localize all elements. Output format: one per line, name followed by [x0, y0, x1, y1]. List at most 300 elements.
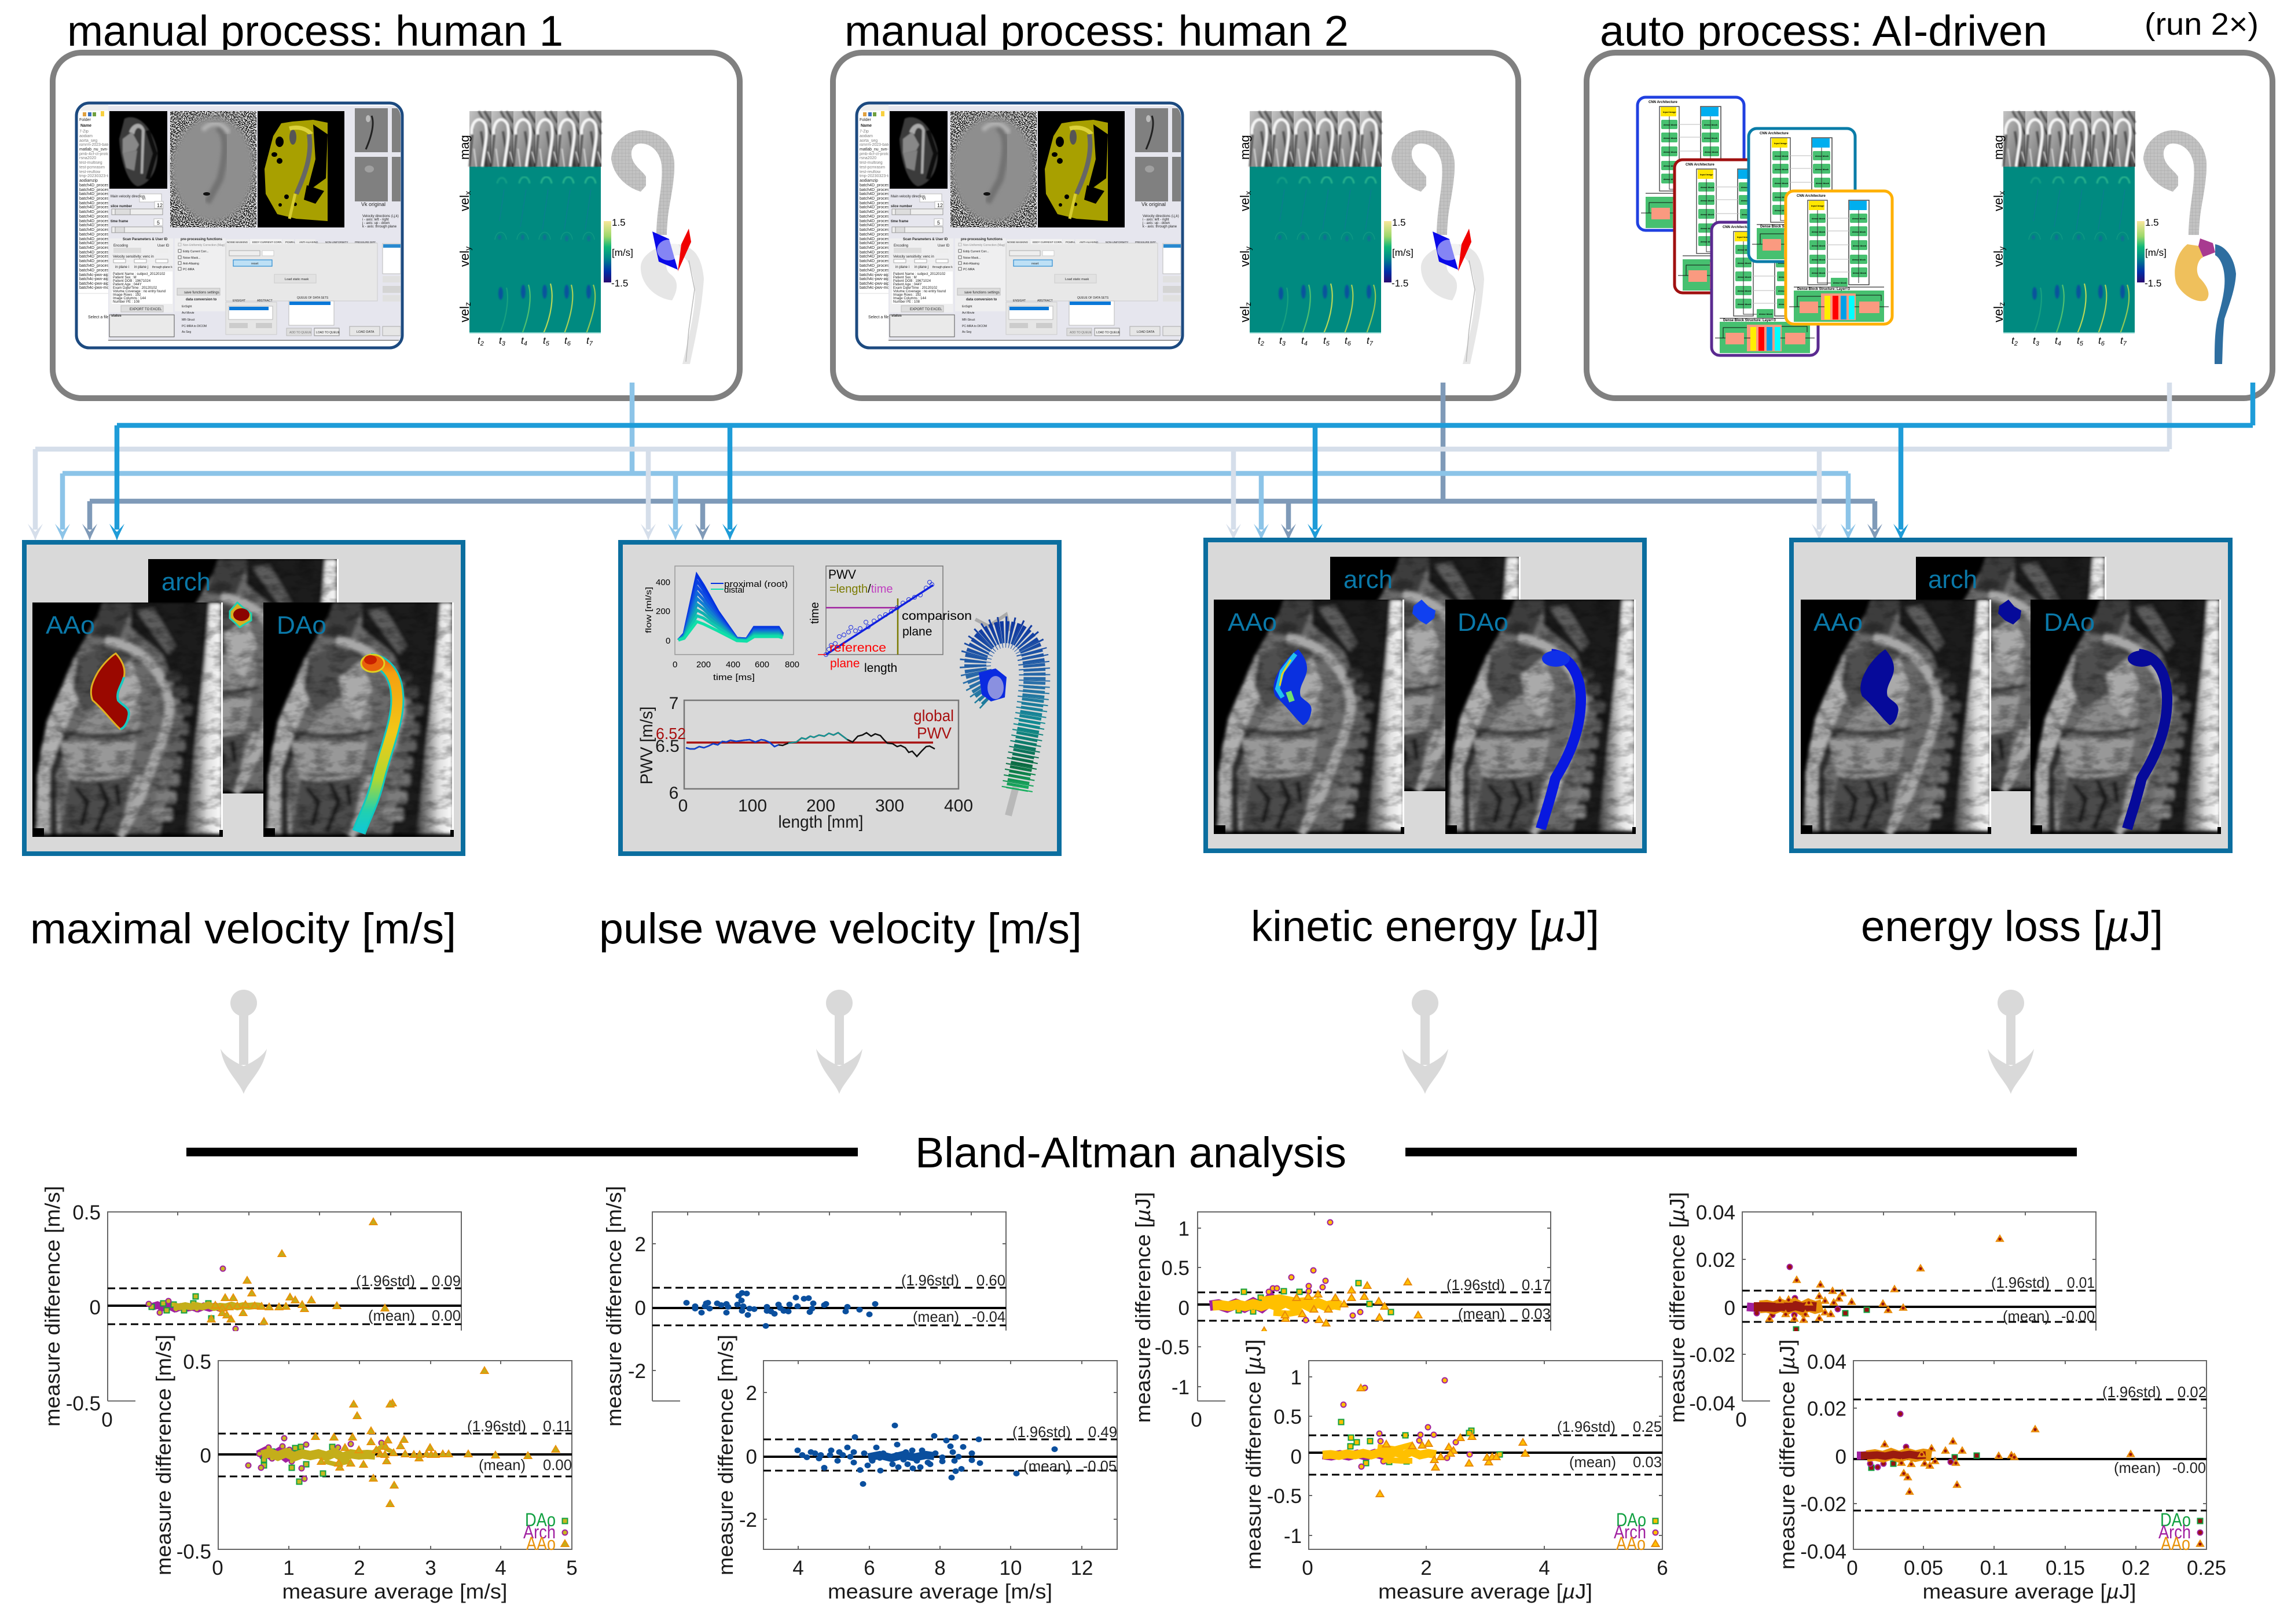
chart group: maximal velocity Bland-Altman, front plot: 3	[425, 1557, 436, 1579]
image montage: mag and velocity frames: x	[1997, 191, 2006, 195]
connector: light blue line from human 1	[55, 383, 1856, 541]
label: AAo: AAo	[46, 611, 95, 640]
chart group: maximal velocity Bland-Altman, front plot: measure average [m/s]	[282, 1579, 507, 1603]
image montage: mag and velocity frames: vel	[1238, 251, 1252, 267]
chart: PWV along the length: length [mm]	[778, 813, 864, 832]
image montage: mag and velocity frames: vel	[457, 251, 472, 267]
chart group: pulse wave velocity Bland-Altman, back plot: 0.60	[976, 1272, 1005, 1289]
image montage: mag and velocity frames: x	[463, 191, 472, 195]
chart group: energy loss Bland-Altman, front plot: 0.04	[1807, 1351, 1846, 1373]
label: DAo: DAo	[277, 611, 326, 640]
image montage: mag and velocity frames: t	[1301, 335, 1304, 346]
chart group: maximal velocity Bland-Altman, back plot: measure difference [m/s]	[41, 1186, 64, 1427]
chart: flow curves: distal	[724, 585, 744, 595]
chart group: kinetic energy Bland-Altman, back plot: 0	[1178, 1297, 1189, 1320]
overlay: DAo energy loss top	[2128, 651, 2156, 667]
image montage: mag and velocity frames: vel	[1991, 195, 2006, 211]
chart group: energy loss Bland-Altman, back plot: 0	[1724, 1297, 1735, 1320]
image montage: mag and velocity frames: t	[543, 335, 546, 346]
chart group: maximal velocity Bland-Altman, front plot: 0.11	[543, 1417, 572, 1435]
chart group: kinetic energy Bland-Altman, back plot: 0.5	[1161, 1257, 1189, 1280]
legend: Arch	[1614, 1522, 1646, 1542]
image montage: mag and velocity frames: 3	[2036, 340, 2040, 347]
chart group: energy loss Bland-Altman, front plot: measure average [ µJ]	[1923, 1579, 2136, 1603]
label: DAo: DAo	[1457, 608, 1508, 637]
chart group: kinetic energy Bland-Altman, back plot: -0.5	[1155, 1336, 1189, 1359]
image montage: mag and velocity frames: 4	[1304, 340, 1308, 347]
chart group: kinetic energy Bland-Altman, back plot: (mean)	[1458, 1305, 1505, 1322]
chart: PWV time vs length	[809, 566, 972, 675]
image montage: mag and velocity frames: 6	[2101, 340, 2105, 347]
chart group: pulse wave velocity Bland-Altman, front plot: 2	[746, 1382, 757, 1405]
image montage: mag and velocity frames: 6	[1348, 340, 1352, 347]
image montage: mag and velocity frames	[457, 111, 601, 347]
chart group: maximal velocity Bland-Altman, front plot: -0.5	[177, 1541, 211, 1563]
chart group: kinetic energy Bland-Altman, front plot: 1	[1291, 1366, 1302, 1389]
chart group: kinetic energy Bland-Altman, back plot: measure difference [µJ]	[1131, 1192, 1155, 1423]
heading: kinetic energy: kinetic energy [µJ]	[1251, 902, 1599, 950]
chart group: maximal velocity Bland-Altman, back plot: (1.96std)	[356, 1272, 415, 1289]
chart group: maximal velocity Bland-Altman, front plot: 0	[200, 1445, 211, 1467]
image montage: mag and velocity frames: t	[521, 335, 524, 346]
network architecture cards: CNN Architecture	[1723, 226, 1752, 229]
image montage: mag and velocity frames: z	[463, 302, 472, 306]
chart: PWV time vs length: comparison	[902, 609, 972, 623]
image: DAo slice	[2031, 600, 2221, 834]
overlay: AAo kinetic energy	[1273, 649, 1312, 725]
chart group: maximal velocity Bland-Altman, front plot: 0.5	[183, 1351, 211, 1373]
image montage: mag and velocity frames: 5	[546, 340, 550, 347]
legend: DAo	[2160, 1509, 2191, 1530]
image montage: mag and velocity frames: 7	[2123, 340, 2127, 347]
chart group: maximal velocity Bland-Altman, back plot: 0	[90, 1296, 101, 1319]
image montage: mag and velocity frames: t	[2077, 335, 2080, 346]
chart group: energy loss Bland-Altman, front plot: -0.04	[1800, 1541, 1846, 1563]
panel: maximal velocity maps	[24, 542, 463, 854]
white cover behind front plot	[1770, 1331, 2211, 1624]
chart: flow curves: time [ms]	[713, 673, 755, 682]
legend: AAo	[526, 1533, 556, 1554]
chart group: pulse wave velocity Bland-Altman, back plot: 2	[635, 1233, 646, 1256]
chart group: pulse wave velocity Bland-Altman, front plot: (mean)	[1023, 1457, 1071, 1475]
legend: DAo	[525, 1509, 556, 1530]
image montage: mag and velocity frames: x	[1243, 191, 1253, 195]
image montage: mag and velocity frames: t	[1345, 335, 1348, 346]
image montage: mag and velocity frames: t	[2098, 335, 2101, 346]
chart group: maximal velocity Bland-Altman, front plot: 1	[283, 1557, 295, 1579]
chart group: kinetic energy Bland-Altman, front plot: 0	[1291, 1446, 1302, 1468]
chart group: energy loss Bland-Altman, back plot: (mean)	[2003, 1307, 2050, 1325]
chart group: energy loss Bland-Altman, front plot: 0.25	[2187, 1557, 2226, 1579]
colorbar: -1.5	[1392, 278, 1408, 289]
image montage: mag and velocity frames: 2	[480, 340, 484, 347]
panel: manual process human 2	[833, 53, 1518, 398]
chart group: energy loss Bland-Altman, front plot: (1.96std)	[2102, 1383, 2161, 1401]
colorbar: -1.5	[2145, 278, 2161, 289]
chart group: kinetic energy Bland-Altman, front plot: 4	[1539, 1557, 1550, 1579]
image: DAo slice	[1445, 600, 1636, 834]
chart group: maximal velocity Bland-Altman, front plot: 0.00	[543, 1456, 572, 1474]
chart group: kinetic energy Bland-Altman, back plot: 0	[1191, 1409, 1202, 1431]
chart group: pulse wave velocity Bland-Altman, front plot: 8	[934, 1557, 946, 1579]
chart group: maximal velocity Bland-Altman, front plot: 2	[354, 1557, 365, 1579]
chart: PWV time vs length: plane	[902, 625, 932, 638]
legend: Arch	[2158, 1522, 2191, 1542]
panel: manual process human 1	[53, 53, 740, 398]
chart: flow curves: 400	[656, 578, 670, 587]
colorbar: 1.5	[2145, 217, 2159, 228]
network architecture cards: Dense Block Structure: Layer=3	[1797, 288, 1851, 291]
chart: PWV along the length: PWV [m/s]	[637, 706, 656, 785]
image: arch slice	[148, 559, 339, 793]
image montage: mag and velocity frames: z	[1997, 302, 2006, 306]
chart group: energy loss Bland-Altman, front plot: 0.05	[1904, 1557, 1943, 1579]
image: AAo slice	[1214, 600, 1404, 834]
title: manual process human 2: manual process: human 2	[845, 7, 1349, 55]
legend	[2158, 1509, 2200, 1554]
colorbar: [m/s]	[612, 247, 633, 258]
chart: PWV along the length	[637, 694, 973, 832]
chart: flow curves: flow [ml/s]	[644, 587, 653, 633]
chart group: energy loss Bland-Altman, front plot: -0.02	[1800, 1493, 1846, 1516]
colorbar	[1384, 217, 1413, 289]
legend: Arch	[523, 1522, 556, 1542]
chart group: energy loss Bland-Altman, front plot: measure difference [µJ]	[1775, 1339, 1799, 1570]
label: AAo: AAo	[1813, 608, 1863, 637]
chart group: pulse wave velocity Bland-Altman, front plot: measure average [m/s]	[828, 1579, 1052, 1603]
chart: PWV time vs length: reference	[829, 641, 886, 655]
chart group: kinetic energy Bland-Altman, front plot: 0.25	[1633, 1418, 1662, 1435]
chart: flow curves: 200	[656, 607, 670, 616]
chart group: energy loss Bland-Altman, back plot: -0.00	[2061, 1307, 2095, 1325]
image montage: mag and velocity frames: 2	[1260, 340, 1264, 347]
connector: slate line from human 2	[82, 383, 1882, 541]
chart group: energy loss Bland-Altman, back plot: (1.96std)	[1991, 1274, 2050, 1291]
chart: PWV time vs length: plane	[830, 657, 860, 670]
chart group: maximal velocity Bland-Altman, back plot	[41, 1186, 461, 1431]
arrow: kinetic energy to Bland-Altman	[1402, 990, 1448, 1094]
image montage: mag and velocity frames: 2	[2014, 340, 2018, 347]
chart group: maximal velocity Bland-Altman, front plot: 5	[566, 1557, 578, 1579]
image: AAo slice	[1801, 600, 1991, 834]
chart group: energy loss Bland-Altman, front plot	[1775, 1339, 2226, 1603]
chart: flow curves: proximal (root)	[724, 579, 788, 589]
overlay: DAo energy loss	[2127, 654, 2167, 829]
panel: energy loss maps	[1791, 540, 2230, 851]
image montage: mag and velocity frames	[1991, 111, 2135, 347]
chart group: energy loss Bland-Altman, back plot: 0	[1735, 1409, 1747, 1431]
chart group: pulse wave velocity Bland-Altman, back plot: (mean)	[913, 1308, 959, 1325]
chart: flow curves: 800	[785, 660, 799, 670]
legend: DAo	[1616, 1509, 1646, 1530]
label: arch: arch	[161, 568, 211, 596]
colorbar: [m/s]	[1392, 247, 1413, 258]
image: DAo slice	[263, 602, 454, 837]
chart: PWV along the length: 6.52	[656, 725, 686, 743]
image montage: mag and velocity frames: t	[2011, 335, 2014, 346]
legend	[1614, 1509, 1655, 1554]
chart group: kinetic energy Bland-Altman, front plot: 0	[1302, 1557, 1313, 1579]
image montage: mag and velocity frames: t	[564, 335, 567, 346]
overlay: AAo velocity	[91, 653, 129, 729]
chart: flow curves: 200	[696, 660, 711, 670]
connector: pale line from AI run 1	[28, 383, 2169, 541]
image montage: mag and velocity frames: 7	[589, 340, 593, 347]
chart group: energy loss Bland-Altman, front plot: (mean)	[2114, 1459, 2161, 1476]
image montage: mag and velocity frames: t	[1367, 335, 1370, 346]
chart group: kinetic energy Bland-Altman, back plot: (1.96std)	[1446, 1276, 1505, 1294]
chart group: kinetic energy Bland-Altman, front plot: (1.96std)	[1557, 1418, 1616, 1435]
image montage: mag and velocity frames: 3	[502, 340, 506, 347]
chart group: maximal velocity Bland-Altman, front plot: 0	[212, 1557, 223, 1579]
title: auto process AI-driven: auto process: AI-driven	[1600, 7, 2047, 55]
screenshot: processing software interface	[76, 103, 402, 348]
chart: flow curves: 0	[673, 660, 677, 670]
label: arch: arch	[1928, 565, 1977, 594]
overlay: DAo kinetic energy	[1541, 654, 1581, 829]
chart: PWV time vs length: length	[864, 662, 897, 675]
overlay: arch energy loss	[1998, 600, 2021, 624]
network architecture cards: Dense Block Structure: Layer=3	[1760, 225, 1813, 229]
arrow: pulse wave velocity to Bland-Altman	[816, 990, 862, 1094]
network architecture cards	[1638, 97, 1892, 355]
chart group: pulse wave velocity Bland-Altman, front plot: -2	[739, 1509, 757, 1531]
chart group: energy loss Bland-Altman, front plot: 0.15	[2046, 1557, 2085, 1579]
overlay: DAo velocity	[359, 655, 397, 832]
colorbar: -1.5	[611, 278, 628, 289]
chart group: pulse wave velocity Bland-Altman, back plot: 0	[635, 1297, 646, 1320]
colorbar: 1.5	[1392, 217, 1406, 228]
network architecture cards: Dense Block Structure: Layer=3	[1723, 319, 1776, 322]
chart group: kinetic energy Bland-Altman, front plot: measure average [ µJ]	[1378, 1579, 1592, 1603]
colorbar: 1.5	[612, 217, 626, 228]
chart group: maximal velocity Bland-Altman, back plot: 0.5	[72, 1202, 101, 1224]
chart group: pulse wave velocity Bland-Altman, front plot: 0	[746, 1446, 757, 1468]
chart group: kinetic energy Bland-Altman, front plot: -1	[1284, 1525, 1302, 1548]
chart group: energy loss Bland-Altman, front plot: 0	[1835, 1446, 1846, 1468]
image montage: mag and velocity frames: 6	[567, 340, 571, 347]
screenshot: processing software interface	[857, 103, 1183, 348]
chart group: energy loss Bland-Altman, front plot: 0.02	[2178, 1383, 2206, 1401]
chart group: maximal velocity Bland-Altman, back plot: 0.09	[432, 1272, 461, 1289]
image montage: mag and velocity frames: vel	[1991, 306, 2006, 322]
image montage: mag and velocity frames: t	[2055, 335, 2058, 346]
chart group: kinetic energy Bland-Altman, back plot: -1	[1172, 1376, 1189, 1399]
arrow: maximal velocity to Bland-Altman	[221, 990, 267, 1094]
chart: PWV along the length: 300	[875, 796, 904, 815]
chart group: energy loss Bland-Altman, front plot: 0.02	[1807, 1398, 1846, 1420]
chart group: kinetic energy Bland-Altman, back plot: 1	[1178, 1218, 1189, 1240]
image montage: mag and velocity frames: 4	[524, 340, 527, 347]
chart group: pulse wave velocity Bland-Altman, front plot: measure difference [m/s]	[714, 1335, 737, 1575]
image montage: mag and velocity frames: y	[1997, 247, 2006, 251]
chart group: pulse wave velocity Bland-Altman, back plot: -0.04	[972, 1308, 1005, 1325]
chart group: kinetic energy Bland-Altman, front plot: 6	[1657, 1557, 1668, 1579]
heading: maximal velocity: maximal velocity [m/s]	[30, 905, 456, 953]
chart group: pulse wave velocity Bland-Altman, front plot: 0.49	[1088, 1423, 1117, 1441]
white cover behind front plot	[135, 1331, 579, 1624]
image montage: mag and velocity frames: 5	[1326, 340, 1330, 347]
label: AAo: AAo	[1228, 608, 1277, 637]
image montage: mag and velocity frames: t	[478, 335, 480, 346]
image montage: mag and velocity frames	[1238, 111, 1382, 347]
heading: energy loss: energy loss [µJ]	[1861, 902, 2163, 950]
chart group: kinetic energy Bland-Altman, back plot: 0.17	[1522, 1276, 1551, 1294]
chart: flow curves: 0	[666, 636, 670, 646]
image montage: mag and velocity frames: t	[586, 335, 589, 346]
image: arch slice	[1330, 557, 1521, 791]
chart group: kinetic energy Bland-Altman, front plot: 0.03	[1633, 1453, 1662, 1471]
network architecture cards: CNN Architecture	[1686, 163, 1714, 167]
chart group: maximal velocity Bland-Altman, front plot	[152, 1335, 578, 1603]
image montage: mag and velocity frames: 7	[1370, 340, 1374, 347]
label: DAo: DAo	[2044, 608, 2095, 637]
image montage: mag and velocity frames: 3	[1282, 340, 1286, 347]
chart group: kinetic energy Bland-Altman, front plot	[1242, 1339, 1668, 1603]
chart group: maximal velocity Bland-Altman, front plot: measure difference [m/s]	[152, 1335, 175, 1575]
image: arch slice	[1916, 557, 2106, 791]
image montage: mag and velocity frames: t	[1258, 335, 1261, 346]
legend: AAo	[2161, 1533, 2190, 1554]
image montage: mag and velocity frames: vel	[457, 195, 472, 211]
connector: bright blue line from AI run 2	[109, 383, 2253, 541]
chart: PWV along the length: 6.5	[655, 737, 680, 756]
title: manual process human 1: manual process: human 1	[67, 7, 563, 55]
image montage: mag and velocity frames: 5	[2080, 340, 2084, 347]
chart: PWV time vs length: time	[809, 602, 821, 624]
chart group: energy loss Bland-Altman, back plot: 0.01	[2067, 1274, 2095, 1291]
aorta segmentation with planes	[1392, 130, 1484, 364]
chart group: pulse wave velocity Bland-Altman, back plot: -2	[628, 1360, 646, 1383]
chart: PWV along the length: 7	[669, 694, 678, 713]
image montage: mag and velocity frames: 4	[2058, 340, 2061, 347]
chart: PWV along the length: global	[913, 707, 954, 725]
chart: PWV time vs length: =length/time	[829, 583, 893, 596]
legend	[523, 1509, 565, 1554]
chart group: pulse wave velocity Bland-Altman, front plot: 4	[792, 1557, 804, 1579]
image montage: mag and velocity frames: mag	[1238, 135, 1252, 160]
chart group: kinetic energy Bland-Altman, front plot: measure difference [µJ]	[1242, 1339, 1265, 1570]
chart group: pulse wave velocity Bland-Altman, front plot: 6	[864, 1557, 875, 1579]
chart: flow curves: 400	[726, 660, 740, 670]
chart group: energy loss Bland-Altman, back plot: 0.02	[1696, 1249, 1735, 1272]
image montage: mag and velocity frames: y	[1243, 247, 1253, 251]
chart: PWV along the length: 6	[669, 784, 678, 803]
image montage: mag and velocity frames: y	[463, 247, 472, 251]
chart group: energy loss Bland-Altman, back plot: -0.02	[1689, 1344, 1735, 1366]
panel: auto process AI-driven	[1587, 53, 2272, 398]
image montage: mag and velocity frames: t	[499, 335, 502, 346]
network architecture cards: CNN Architecture	[1649, 101, 1677, 104]
chart group: maximal velocity Bland-Altman, back plot: 0.00	[432, 1307, 461, 1324]
chart group: kinetic energy Bland-Altman, front plot: -0.5	[1267, 1485, 1302, 1508]
image montage: mag and velocity frames: z	[1243, 302, 1253, 306]
image montage: mag and velocity frames: vel	[1238, 306, 1252, 322]
chart: PWV along the length: 400	[944, 796, 973, 815]
aorta segmentation coloured by region	[2143, 130, 2236, 364]
chart group: energy loss Bland-Altman, back plot: measure difference [µJ]	[1665, 1192, 1689, 1423]
chart group: energy loss Bland-Altman, back plot	[1665, 1192, 2096, 1431]
chart group: maximal velocity Bland-Altman, front plot: (1.96std)	[467, 1417, 526, 1435]
image montage: mag and velocity frames: t	[2033, 335, 2036, 346]
chart: PWV along the length: 100	[738, 796, 767, 815]
heading: pulse wave velocity: pulse wave velocity [m/s]	[599, 905, 1082, 953]
label: arch: arch	[1343, 565, 1393, 594]
colorbar	[2137, 217, 2167, 289]
image montage: mag and velocity frames: vel	[1991, 251, 2006, 267]
panel: pulse wave velocity analysis	[621, 542, 1059, 854]
chart: PWV along the length: 0	[678, 796, 688, 815]
section heading: Bland-Altman analysis: Bland-Altman analysis	[915, 1129, 1346, 1177]
arrow: energy loss to Bland-Altman	[1988, 990, 2034, 1094]
chart group: maximal velocity Bland-Altman, back plot: (mean)	[368, 1307, 415, 1324]
legend: AAo	[1616, 1533, 1646, 1554]
chart group: kinetic energy Bland-Altman, front plot: 2	[1420, 1557, 1432, 1579]
chart group: energy loss Bland-Altman, front plot: -0.00	[2172, 1459, 2206, 1476]
colorbar: [m/s]	[2145, 247, 2167, 258]
chart group: pulse wave velocity Bland-Altman, front plot: (1.96std)	[1012, 1423, 1071, 1441]
chart: flow curves	[644, 566, 799, 682]
image montage: mag and velocity frames: mag	[457, 135, 472, 160]
image montage: mag and velocity frames: mag	[1991, 135, 2006, 160]
network architecture cards: CNN Architecture	[1797, 194, 1826, 198]
chart: PWV time vs length: PWV	[828, 567, 856, 582]
chart group: maximal velocity Bland-Altman, back plot: -0.5	[66, 1392, 101, 1415]
chart group: energy loss Bland-Altman, back plot: 0.04	[1696, 1202, 1735, 1224]
image montage: mag and velocity frames: t	[2120, 335, 2123, 346]
chart group: pulse wave velocity Bland-Altman, front plot	[714, 1335, 1117, 1603]
image montage: mag and velocity frames: vel	[457, 306, 472, 322]
image: AAo slice	[32, 602, 223, 837]
image montage: mag and velocity frames: t	[1323, 335, 1326, 346]
chart group: pulse wave velocity Bland-Altman, front plot: 10	[1000, 1557, 1022, 1579]
network architecture cards: CNN Architecture	[1760, 132, 1789, 135]
chart group: kinetic energy Bland-Altman, front plot: (mean)	[1569, 1453, 1616, 1471]
image montage: mag and velocity frames: t	[1279, 335, 1282, 346]
illustration: aorta with cross-section planes	[975, 615, 1034, 815]
white cover behind front plot	[1225, 1331, 1667, 1624]
panel: kinetic energy maps	[1206, 540, 1644, 851]
chart: PWV along the length: 200	[806, 796, 835, 815]
chart group: pulse wave velocity Bland-Altman, back plot: measure difference [m/s]	[602, 1186, 626, 1427]
chart group: energy loss Bland-Altman, front plot: 0.2	[2122, 1557, 2150, 1579]
heading rule left	[186, 1148, 858, 1156]
chart group: maximal velocity Bland-Altman, front plot: 4	[495, 1557, 506, 1579]
chart group: pulse wave velocity Bland-Altman, back plot: (1.96std)	[901, 1272, 959, 1289]
chart group: kinetic energy Bland-Altman, back plot: 0.03	[1522, 1305, 1551, 1322]
heading rule right	[1405, 1148, 2077, 1156]
chart group: energy loss Bland-Altman, front plot: 0.1	[1980, 1557, 2008, 1579]
chart group: pulse wave velocity Bland-Altman, back plot	[602, 1186, 1006, 1427]
chart: PWV along the length: PWV	[917, 724, 952, 742]
overlay: DAo kinetic energy top	[1542, 651, 1570, 667]
chart group: energy loss Bland-Altman, front plot: 0	[1846, 1557, 1858, 1579]
chart group: maximal velocity Bland-Altman, back plot: 0	[101, 1409, 113, 1431]
image montage: mag and velocity frames: vel	[1238, 195, 1252, 211]
chart: flow curves: 600	[755, 660, 769, 670]
white cover behind front plot	[680, 1331, 1123, 1624]
chart group: pulse wave velocity Bland-Altman, front plot: -0.05	[1083, 1457, 1117, 1475]
overlay: arch velocity	[230, 602, 251, 627]
chart group: kinetic energy Bland-Altman, back plot	[1131, 1192, 1551, 1431]
aorta segmentation with planes	[611, 130, 704, 364]
chart group: pulse wave velocity Bland-Altman, front plot: 12	[1071, 1557, 1093, 1579]
chart group: maximal velocity Bland-Altman, front plot: (mean)	[479, 1456, 526, 1474]
chart group: energy loss Bland-Altman, back plot: -0.04	[1689, 1392, 1735, 1415]
overlay: arch kinetic energy	[1412, 600, 1435, 624]
overlay: AAo energy loss	[1860, 649, 1899, 725]
note: run twice: (run 2×)	[2145, 7, 2259, 42]
